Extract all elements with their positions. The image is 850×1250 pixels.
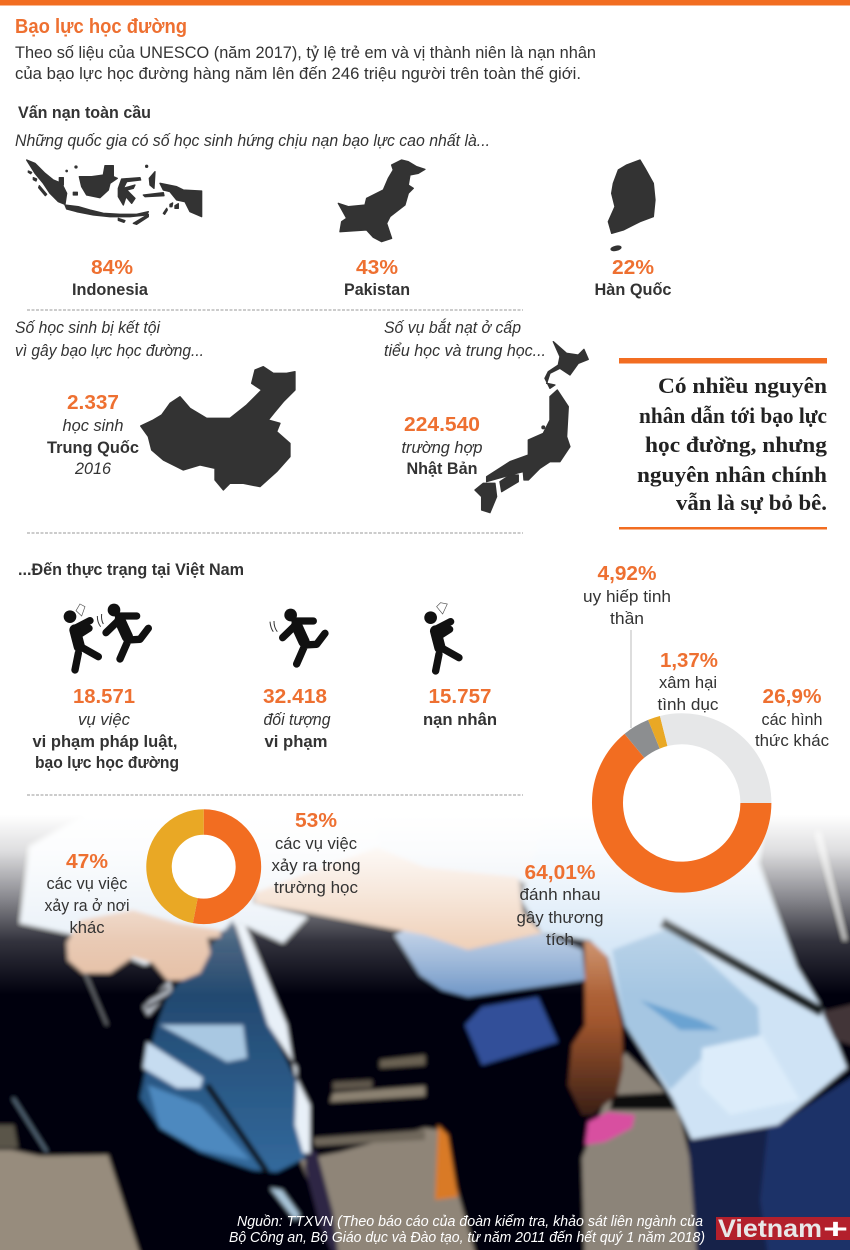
stat: offenders [263, 686, 331, 751]
stat: cases: vụ việc [78, 710, 130, 729]
label: 26.9% [755, 686, 829, 750]
callout: main cause: học đường, nhưng [645, 432, 827, 457]
light area behind arm [250, 780, 400, 895]
map: South Korea [608, 160, 655, 251]
top bar [0, 0, 850, 6]
label: 64.01%: 64,01% [524, 862, 596, 884]
stat: China: học sinh [62, 416, 124, 435]
orange strap [435, 1125, 458, 1200]
label: 1.37%: 1,37% [660, 650, 718, 672]
title: Bạo lực học đường [15, 16, 187, 38]
callout: main cause: Có nhiều nguyên [658, 373, 827, 398]
label: 47% elsewhere [44, 851, 130, 937]
label: 64.01%: gây thương [516, 908, 604, 927]
forearm [568, 940, 623, 1115]
label: 26.9%: các hình [762, 710, 822, 729]
source [229, 1213, 705, 1246]
photo fade [0, 770, 850, 995]
subheading: countries: Những quốc gia có số học sinh hứng chịu nạn bạo lực cao nhất là... [15, 131, 490, 150]
stat: Japan: Nhật Bản [406, 459, 478, 478]
logo: Vietnam+: Vietnam [718, 1215, 822, 1243]
left person shirt [20, 780, 307, 965]
label: 26.9%: thức khác [755, 731, 829, 750]
stat: offenders: vi phạm [264, 732, 328, 751]
label: 64.01%: đánh nhau [520, 885, 600, 904]
donut chart: forms of violence [608, 729, 756, 877]
label: 4.92%: thần [610, 609, 644, 628]
label: 53% in school [272, 810, 360, 897]
heading: Vietnam situation: ...Đến thực trạng tại Việt Nam [18, 560, 244, 579]
stat: cases: 18.571 [73, 686, 135, 708]
label: 1.37% [658, 650, 719, 714]
label: 53% in school: 53% [295, 810, 337, 832]
stat: Indonesia: 84% [91, 257, 133, 279]
stat: victims: nạn nhân [423, 710, 497, 729]
backpack strap details [13, 1098, 47, 1152]
label: 53% in school: xảy ra trong [272, 856, 360, 875]
ground and shadows [0, 1150, 145, 1250]
label: 47% elsewhere: các vụ việc [46, 874, 128, 893]
callout: main cause: nhân dẫn tới bạo lực [639, 403, 827, 428]
background photo: students walking [0, 770, 850, 1250]
label: 47% elsewhere: xảy ra ở nơi [44, 896, 130, 915]
icon: two people fighting [64, 604, 148, 670]
map: Japan [475, 342, 588, 513]
heading: global problem: Vấn nạn toàn cầu [18, 103, 151, 122]
label: 47% elsewhere: khác [70, 918, 105, 937]
stat: China [47, 392, 139, 478]
label: 53% in school: trường học [274, 878, 358, 897]
stat: Japan: trường hợp [402, 438, 482, 457]
label: 47% elsewhere: 47% [66, 851, 108, 873]
stat: South Korea: Hàn Quốc [594, 280, 672, 299]
stat: Japan [402, 414, 482, 478]
map: Pakistan [338, 160, 425, 242]
callout: main cause: vẫn là sự bỏ bê. [676, 490, 827, 515]
label: 64.01% [516, 862, 604, 949]
callout: main cause [619, 358, 827, 530]
stat: cases: vi phạm pháp luật, [32, 732, 178, 751]
subheading: students convicted [15, 318, 204, 360]
stat: South Korea [594, 257, 672, 299]
intro text [15, 43, 596, 83]
leader line [630, 630, 632, 728]
stat: Indonesia: Indonesia [72, 280, 149, 299]
label: 4.92% [583, 563, 671, 628]
intro text: của bạo lực học đường hàng năm lên đến 246 triệu người trên toàn thế giới. [15, 64, 581, 83]
subheading: bullying cases: tiểu học và trung học... [384, 341, 546, 360]
middle person shirt [395, 920, 585, 997]
stat: Pakistan [344, 257, 410, 299]
subheading: bullying cases [384, 318, 546, 360]
stat: South Korea: 22% [612, 257, 654, 279]
label: 26.9%: 26,9% [762, 686, 822, 708]
long arm [254, 847, 542, 950]
map: Indonesia [27, 160, 202, 224]
label: 1.37%: xâm hại [659, 673, 717, 692]
stat: offenders: 32.418 [263, 686, 327, 708]
map: China [141, 367, 295, 490]
callout: main cause: nguyên nhân chính [637, 462, 827, 487]
subheading: bullying cases: Số vụ bắt nạt ở cấp [384, 318, 521, 337]
label: 4.92%: uy hiếp tinh [583, 587, 671, 606]
stat: cases: bạo lực học đường [35, 753, 179, 772]
stat: offenders: đối tượng [264, 710, 331, 729]
shoulder strap [662, 922, 822, 1012]
stat: Japan: 224.540 [404, 414, 480, 436]
label: 53% in school: các vụ việc [275, 834, 357, 853]
logo: Vietnam+ [716, 1213, 850, 1244]
subheading: students convicted: Số học sinh bị kết tội [15, 318, 161, 337]
pink object [585, 1112, 635, 1145]
left person trousers detail [305, 1148, 340, 1250]
right person trousers [688, 1065, 850, 1250]
icon: victim [424, 603, 459, 671]
stat: China: 2016 [74, 459, 112, 478]
logo: Vietnam+: + [823, 1213, 848, 1244]
source: Nguồn: TTXVN (Theo báo cáo của đoàn kiểm tra, khảo sát liên ngành của [237, 1213, 703, 1230]
icon: person kicking [270, 609, 325, 664]
stat: Pakistan: Pakistan [344, 280, 410, 299]
stat: cases [32, 686, 179, 772]
stat: Pakistan: 43% [356, 257, 398, 279]
subheading: students convicted: vì gây bạo lực học đường... [15, 341, 204, 360]
stat: Indonesia [72, 257, 149, 299]
donut chart: location of incidents [159, 822, 248, 911]
label: 4.92%: 4,92% [598, 563, 657, 585]
stat: victims: 15.757 [428, 686, 492, 708]
stat: China: 2.337 [67, 392, 119, 414]
intro text: Theo số liệu của UNESCO (năm 2017), tỷ lệ trẻ em và vị thành niên là nạn nhân [15, 43, 596, 62]
left arm and hand [67, 910, 220, 980]
stat: China: Trung Quốc [47, 438, 139, 457]
right person shirt [522, 780, 847, 1140]
label: 64.01%: tích [546, 930, 574, 949]
label: 1.37%: tình dục [658, 695, 719, 714]
stat: victims [423, 686, 497, 729]
source: Bộ Công an, Bộ Giáo dục và Đào tạo, từ năm 2011 đến hết quý 1 năm 2018) [229, 1229, 705, 1246]
